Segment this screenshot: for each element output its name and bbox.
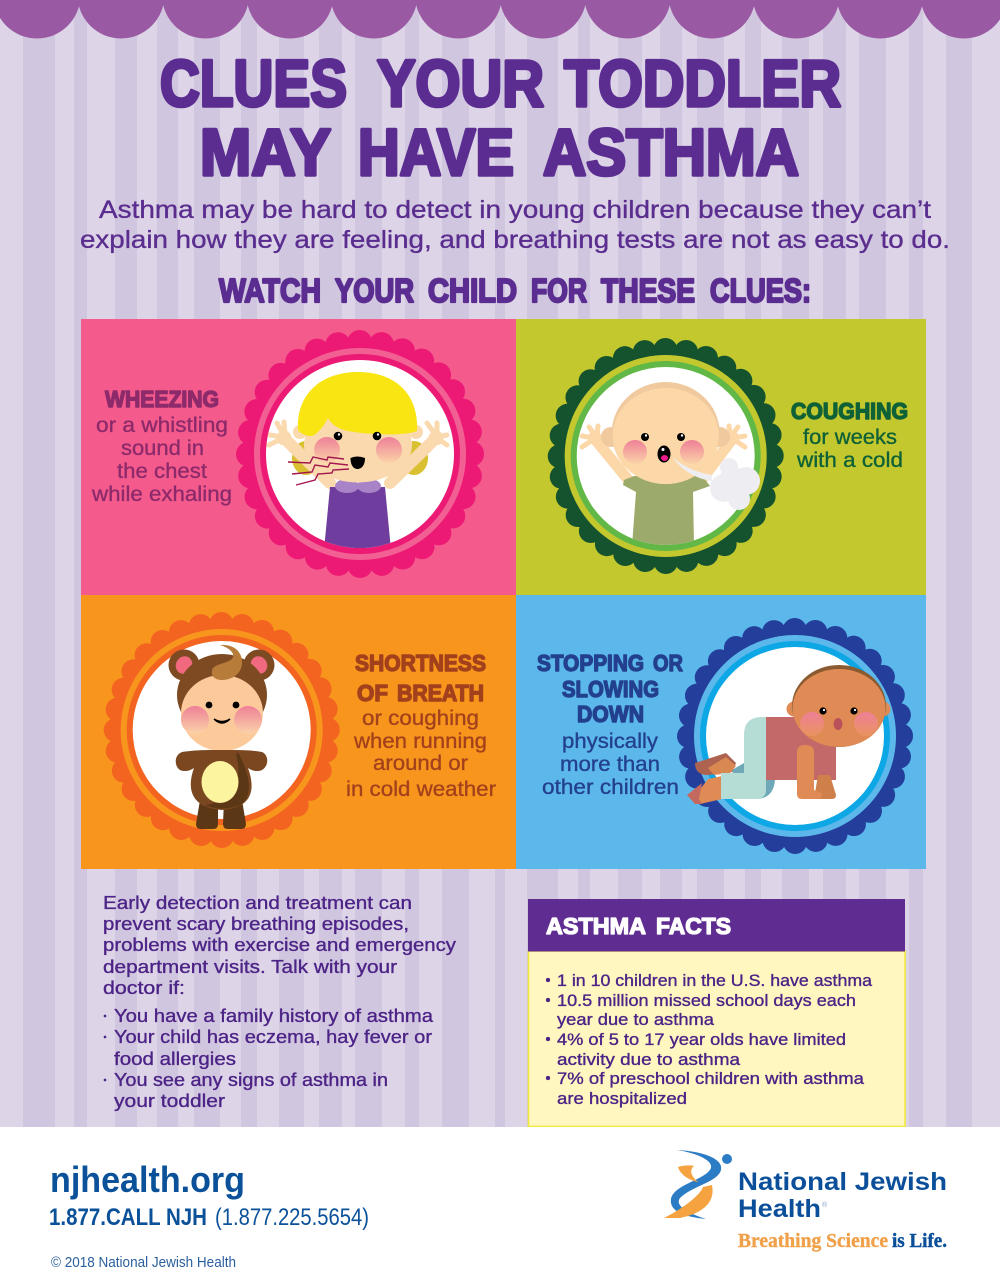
- footer contact details: (1.877.225.5654): [215, 1204, 369, 1231]
- icon: coughing baby: [582, 382, 745, 546]
- panel: stopping or slowing down: [516, 595, 926, 869]
- stopping or slowing text: DOWN: [577, 701, 644, 727]
- title: YOUR: [377, 46, 544, 120]
- early detection text: prevent scary breathing episodes,: [103, 913, 409, 934]
- subheading: [219, 272, 811, 309]
- coughing text: COUGHING: [791, 398, 908, 424]
- icon: crawling baby: [687, 665, 890, 804]
- wheezing text: while exhaling: [91, 483, 232, 506]
- logo tagline: is Life.: [892, 1230, 947, 1252]
- asthma facts list: 4% of 5 to 17 year olds have limited: [557, 1030, 846, 1049]
- panel: coughing: [516, 319, 926, 595]
- panel: wheezing: [81, 319, 516, 595]
- icon: helix: [664, 1150, 732, 1219]
- badge: pink scalloped ring: [244, 338, 476, 570]
- asthma facts heading: [546, 913, 731, 939]
- footer contact details: © 2018 National Jewish Health: [51, 1254, 236, 1271]
- intro text: explain how they are feeling, and breathing tests are not as easy to do.: [80, 226, 950, 254]
- shortness of breath text: SHORTNESS: [355, 650, 486, 676]
- logo tagline: Breathing Science: [738, 1230, 888, 1252]
- subheading: THESE: [601, 272, 695, 309]
- shortness of breath text: OF: [357, 680, 388, 706]
- title: ASTHMA: [543, 115, 799, 189]
- logo wordmark: National Jewish: [738, 1168, 947, 1196]
- subheading: FOR: [531, 272, 587, 309]
- shortness of breath text: [346, 650, 496, 801]
- logo wordmark: ®: [822, 1201, 828, 1209]
- logo: National Jewish Health: [664, 1150, 947, 1252]
- footer contact details: njhealth.org: [50, 1159, 245, 1200]
- asthma facts list: 10.5 million missed school days each: [557, 991, 856, 1010]
- early detection text: your toddler: [114, 1090, 225, 1111]
- asthma facts list: [546, 971, 873, 1108]
- title: CLUES: [160, 46, 347, 120]
- intro text: Asthma may be hard to detect in young children because they can’t: [99, 196, 931, 224]
- panel: asthma facts: [528, 899, 905, 1126]
- asthma facts list: year due to asthma: [557, 1010, 715, 1029]
- stopping or slowing text: other children: [542, 776, 679, 799]
- early detection text: Your child has eczema, hay fever or: [114, 1026, 432, 1047]
- subheading: CLUES:: [710, 272, 811, 309]
- asthma facts list: activity due to asthma: [557, 1050, 741, 1069]
- wheezing text: or a whistling: [96, 414, 228, 437]
- stopping or slowing text: physically: [562, 730, 659, 753]
- wheezing text: WHEEZING: [105, 386, 219, 412]
- wheezing text: sound in: [121, 437, 204, 460]
- icon: toddler in bear costume: [168, 645, 274, 829]
- asthma facts list: 7% of preschool children with asthma: [557, 1069, 865, 1088]
- footer contact details: [49, 1159, 369, 1271]
- early detection text: department visits. Talk with your: [103, 956, 397, 977]
- subheading: YOUR: [335, 272, 414, 309]
- title: HAVE: [358, 115, 514, 189]
- asthma facts heading: FACTS: [656, 913, 731, 939]
- footer contact details: 1.877.CALL NJH: [49, 1204, 207, 1231]
- badge: orange scalloped ring: [111, 619, 333, 841]
- early detection text: food allergies: [114, 1048, 236, 1069]
- subheading: CHILD: [428, 272, 517, 309]
- coughing text: for weeks: [803, 426, 897, 449]
- stopping or slowing text: SLOWING: [562, 676, 659, 702]
- coughing text: with a cold: [796, 449, 903, 472]
- icon: wheezing girl: [269, 372, 447, 550]
- title: TODDLER: [564, 46, 841, 120]
- asthma facts heading: ASTHMA: [546, 913, 646, 939]
- early detection text: doctor if:: [103, 977, 185, 998]
- asthma facts list: 1 in 10 children in the U.S. have asthma: [557, 971, 873, 990]
- title: [160, 46, 841, 189]
- intro text: [80, 196, 950, 254]
- scalloped awning: [0, 0, 1000, 38]
- icon: cough cloud: [672, 457, 760, 510]
- subheading: WATCH: [219, 272, 321, 309]
- coughing text: [791, 398, 908, 472]
- stopping or slowing text: STOPPING: [537, 650, 644, 676]
- early detection text: problems with exercise and emergency: [103, 934, 457, 955]
- wheezing text: the chest: [117, 460, 207, 483]
- early detection text: You have a family history of asthma: [114, 1005, 434, 1026]
- stopping or slowing text: more than: [560, 753, 660, 776]
- shortness of breath text: BREATH: [397, 680, 484, 706]
- early detection text: [103, 892, 457, 1111]
- badge: blue scalloped ring: [684, 625, 906, 847]
- shortness of breath text: around or: [373, 752, 468, 775]
- shortness of breath text: when running: [353, 730, 487, 753]
- footer band: [0, 1127, 1000, 1274]
- early detection text: You see any signs of asthma in: [114, 1069, 388, 1090]
- badge: green scalloped ring: [555, 345, 777, 567]
- shortness of breath text: or coughing: [362, 707, 479, 730]
- stopping or slowing text: OR: [653, 650, 683, 676]
- asthma facts list: are hospitalized: [557, 1089, 687, 1108]
- early detection text: Early detection and treatment can: [103, 892, 412, 913]
- logo wordmark: Health: [738, 1195, 821, 1223]
- wheezing text: [91, 386, 232, 506]
- shortness of breath text: in cold weather: [346, 778, 496, 801]
- title: MAY: [200, 115, 331, 189]
- logo wordmark: [738, 1168, 947, 1223]
- stopping or slowing text: [537, 650, 683, 799]
- panel: shortness of breath: [81, 595, 516, 869]
